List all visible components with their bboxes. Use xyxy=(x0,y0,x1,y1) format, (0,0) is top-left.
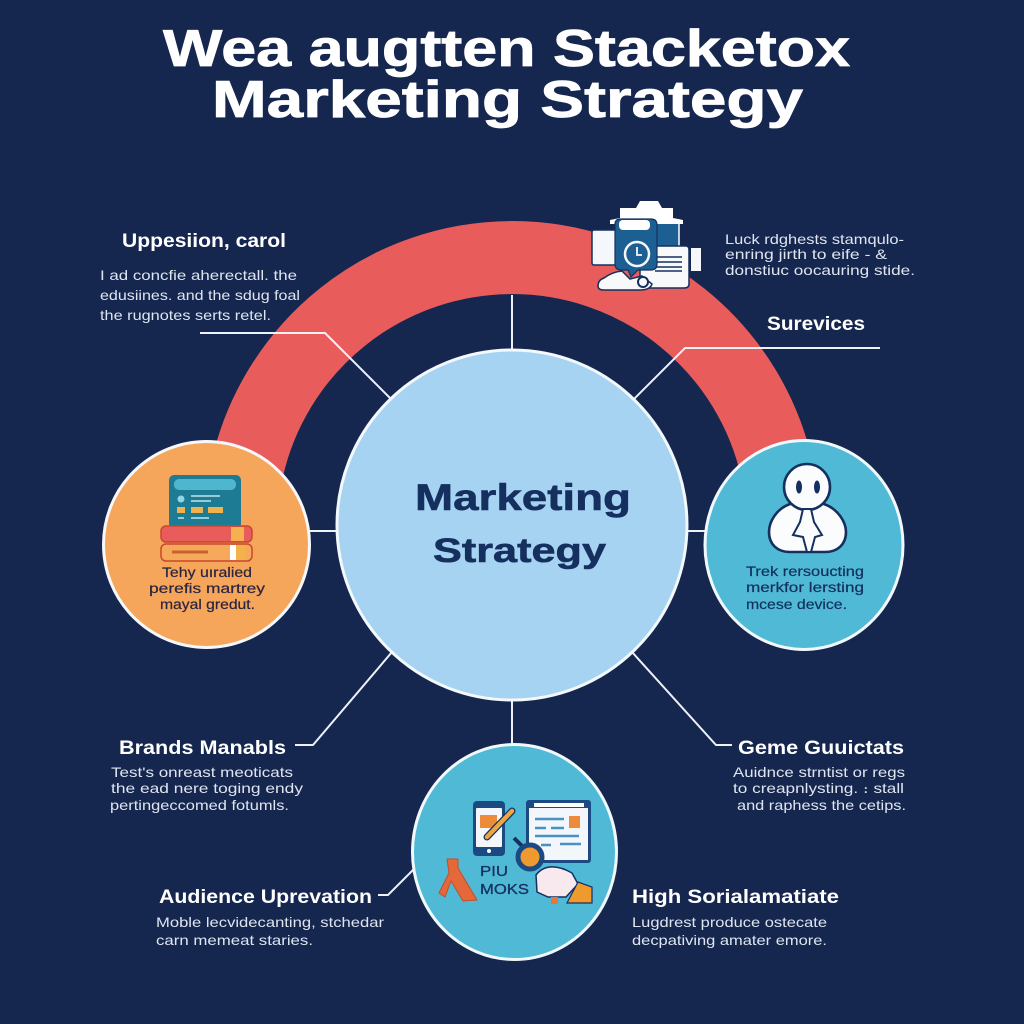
panel: right teal circle xyxy=(705,440,903,650)
center circle xyxy=(337,350,687,700)
text block: lower right: Geme Guuictats xyxy=(738,738,904,759)
text block: lower right: Auidnce strntist or regs xyxy=(733,764,905,780)
center label: Strategy xyxy=(433,532,606,570)
text block: top right xyxy=(725,231,915,278)
heading: Surevices: Surevices xyxy=(767,314,865,335)
text block: top right: Luck rdghests stamqulo- xyxy=(725,231,904,247)
center label: Marketing xyxy=(415,477,631,518)
icon: person xyxy=(769,464,846,552)
icon: phone, browser and hand xyxy=(439,800,592,904)
text block: lower left: Test's onreast meoticats xyxy=(111,764,293,780)
left circle text: perefis martrey xyxy=(149,581,265,596)
title: Wea augtten Stacketox xyxy=(163,20,850,78)
icon caption: MOKS xyxy=(480,881,529,898)
text block: lower left: Brands Manabls xyxy=(119,738,286,759)
text block: bottom left xyxy=(156,887,384,948)
left circle text xyxy=(149,565,265,612)
text block: bottom left: Audience Uprevation xyxy=(159,887,372,908)
text block: lower left xyxy=(110,738,303,813)
text block: bottom left: carn memeat staries. xyxy=(156,932,313,948)
text block: lower left: the ead nere toging endy xyxy=(111,780,303,796)
connector lines xyxy=(200,295,880,895)
text block: top left: edusiines. and the sdug foal xyxy=(100,287,300,303)
left circle text: Tehy uıralied xyxy=(162,565,252,580)
text block: top left xyxy=(100,231,300,323)
icon caption: PIU xyxy=(480,863,508,880)
icon: camera and document top xyxy=(592,201,701,290)
title xyxy=(163,20,850,129)
right circle text: mcese device. xyxy=(746,597,847,612)
text block: bottom right: decpativing amater emore. xyxy=(632,932,827,948)
right circle text: Trek rersoucting xyxy=(746,564,864,579)
icon caption xyxy=(480,863,529,898)
center label xyxy=(415,477,631,570)
right circle text xyxy=(746,564,864,612)
right circle text: merkfor lersting xyxy=(746,580,864,595)
title: Marketing Strategy xyxy=(212,71,803,129)
text block: top right: enring jirth to eife - & xyxy=(725,246,888,262)
panel: left orange circle xyxy=(104,442,310,648)
text block: lower right xyxy=(733,738,906,813)
panel: bottom teal circle xyxy=(412,744,616,960)
text block: bottom right xyxy=(632,887,839,948)
text block: top left: the rugnotes serts retel. xyxy=(100,307,271,323)
icon: screen and books xyxy=(161,475,252,561)
text block: lower right: and raphess the cetips. xyxy=(737,797,906,813)
text block: lower left: pertingeccomed fotumls. xyxy=(110,797,289,813)
red arc xyxy=(247,258,777,470)
text block: top left: Uppesiion, carol xyxy=(122,231,286,252)
icon: ribbon xyxy=(439,859,477,901)
text block: bottom right: High Sorialamatiate xyxy=(632,887,839,908)
text block: top right: donstiuc oocauring stide. xyxy=(725,262,915,278)
text block: bottom left: Moble lecvidecanting, stchedar xyxy=(156,914,384,930)
text block: bottom right: Lugdrest produce ostecate xyxy=(632,914,827,930)
left circle text: mayal gredut. xyxy=(160,597,255,612)
text block: top left: I ad concfie aherectall. the xyxy=(100,267,297,283)
text block: lower right: to creapnlysting. ։ stall xyxy=(733,780,904,796)
